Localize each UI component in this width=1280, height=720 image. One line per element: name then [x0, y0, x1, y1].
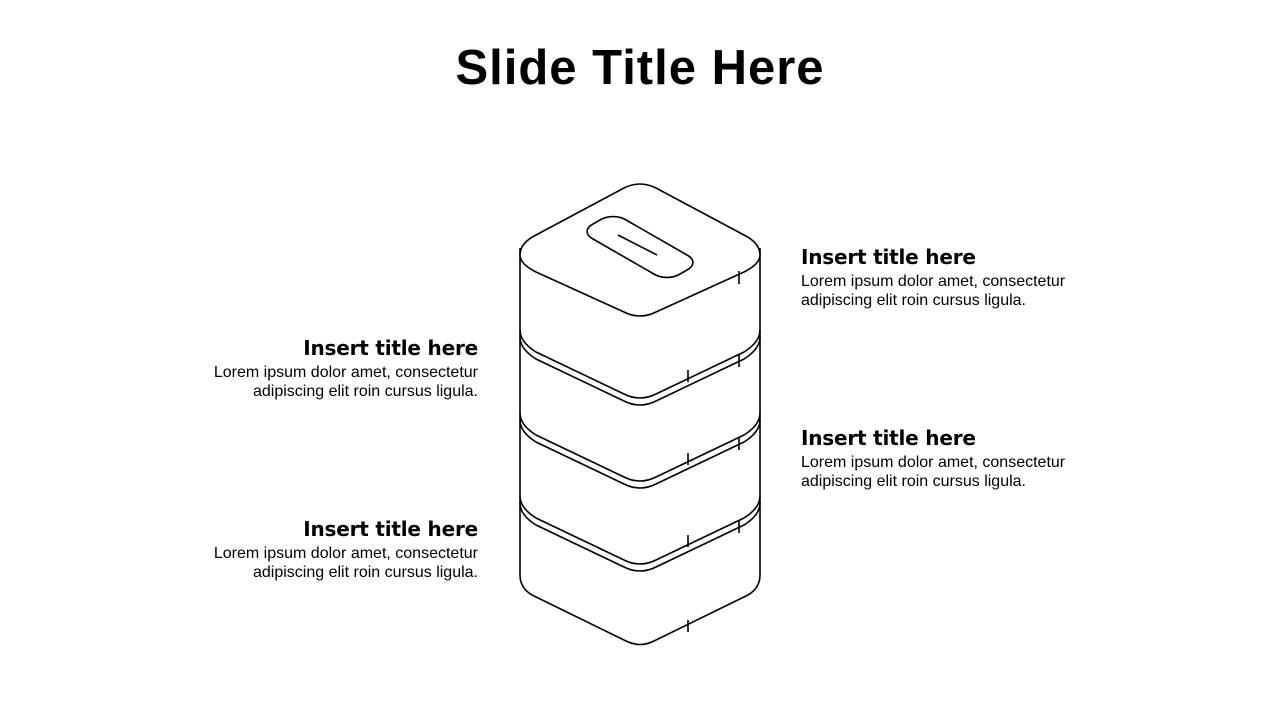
text block: right top: adipiscing elit roin cursus ligula.: [801, 292, 1026, 309]
text block: right lower: adipiscing elit roin cursus ligula.: [801, 473, 1026, 490]
text block: right top: Insert title here: [801, 245, 976, 269]
text block: left lower: Lorem ipsum dolor amet, consectetur: [214, 545, 478, 562]
ticks: [688, 271, 739, 632]
text block: right top: Lorem ipsum dolor amet, consectetur: [801, 273, 1065, 290]
text block: left lower: Insert title here: [303, 517, 478, 541]
separators: [520, 330, 760, 398]
top face: [520, 184, 760, 316]
outer body: [520, 248, 760, 644]
text block: right lower: [801, 426, 1065, 490]
text block: right top: [801, 245, 1065, 309]
text block: left lower: [214, 517, 478, 581]
text block: left upper: Lorem ipsum dolor amet, consectetur: [214, 364, 478, 381]
text block: left upper: [214, 336, 478, 400]
title: Slide Title Here: [455, 41, 825, 95]
text block: right lower: Lorem ipsum dolor amet, consectetur: [801, 454, 1065, 471]
text block: left upper: Insert title here: [303, 336, 478, 360]
text block: left upper: adipiscing elit roin cursus ligula.: [253, 383, 478, 400]
text block: left lower: adipiscing elit roin cursus ligula.: [253, 564, 478, 581]
slot icon: [580, 212, 700, 282]
text block: right lower: Insert title here: [801, 426, 976, 450]
